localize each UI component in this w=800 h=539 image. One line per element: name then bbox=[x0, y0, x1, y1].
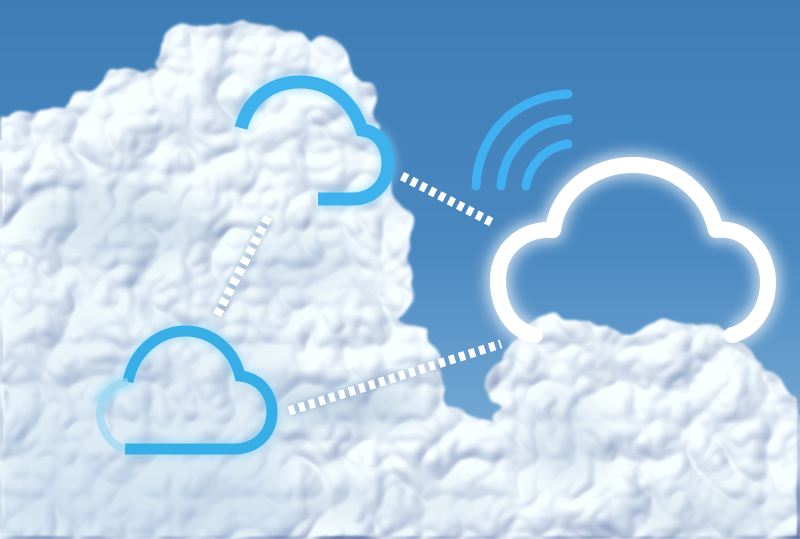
icon: glowing white cloud outline bbox=[498, 165, 768, 335]
puffs on left cloud edge bbox=[2, 22, 571, 516]
large cloud on the left bbox=[0, 24, 585, 539]
icon: bottom blue cloud outline bbox=[100, 331, 272, 449]
puffs on right cloud edge bbox=[490, 312, 786, 411]
cloud on the right bbox=[486, 312, 800, 539]
soft shading across clouds bbox=[0, 187, 790, 539]
dotted link: top cloud to white cloud bbox=[402, 176, 495, 224]
icon: wifi signal arcs bbox=[476, 94, 568, 186]
dotted link: bottom cloud to white cloud bbox=[289, 344, 501, 411]
dotted link: top cloud to bottom cloud bbox=[217, 217, 268, 315]
icon: top blue cloud outline bbox=[241, 82, 388, 199]
